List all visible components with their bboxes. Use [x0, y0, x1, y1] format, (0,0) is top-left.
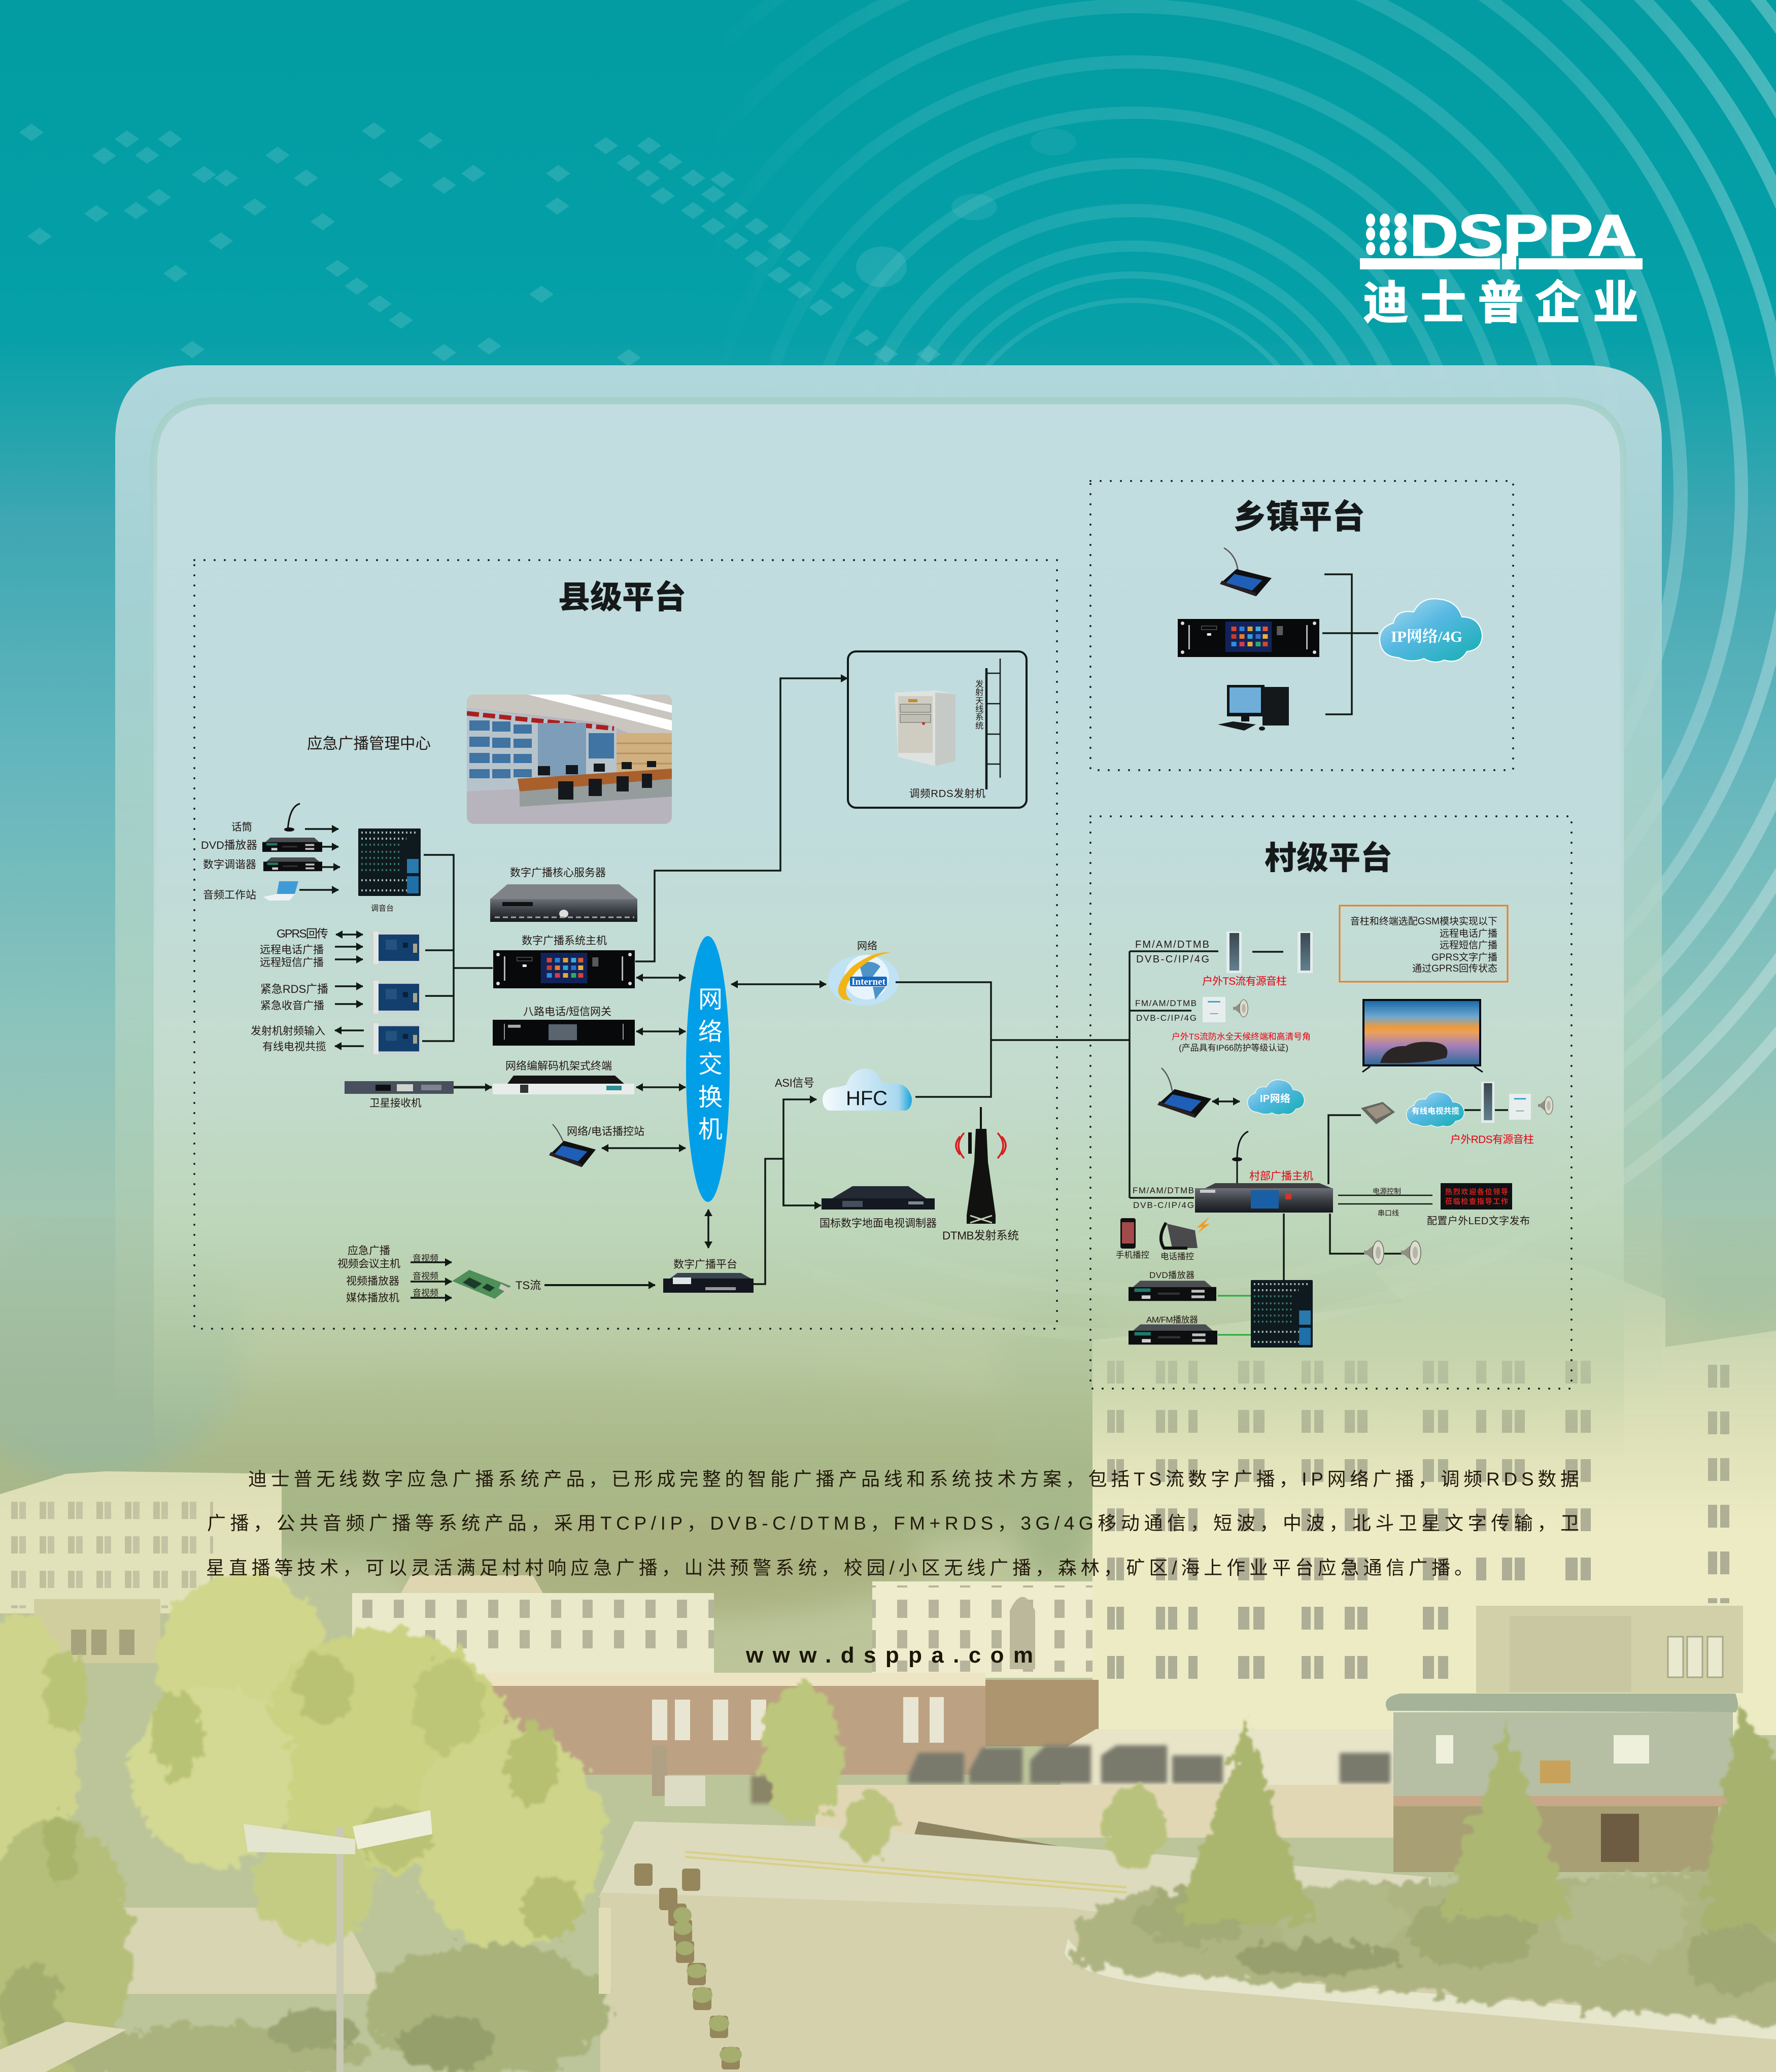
device: satellite receiver — [345, 1081, 454, 1094]
icon: computer — [1218, 685, 1289, 731]
device: modulator — [822, 1186, 935, 1210]
icon: console — [1157, 1068, 1211, 1118]
label: AM FM player: AM/FM播放器 — [1146, 1315, 1198, 1325]
labels: modules: GPRS回传 — [277, 927, 328, 940]
icon: mic — [1232, 1131, 1248, 1184]
speaker column 1 — [1226, 931, 1242, 973]
module card 2 — [370, 980, 422, 1015]
label: platform: 数字广播平台 — [673, 1259, 737, 1270]
labels: modules: 发射机射频输入 — [251, 1025, 325, 1037]
speaker column RDS — [1481, 1082, 1494, 1123]
big right building — [1092, 1240, 1776, 1735]
label: host: 数字广播系统主机 — [522, 935, 607, 947]
label: power control: 电源控制 — [1373, 1187, 1401, 1195]
text block: product description — [206, 1469, 1579, 1578]
logo: DSPPA: DSPPA — [1410, 203, 1636, 268]
labels: modules: 远程电话广播 — [260, 944, 324, 956]
antenna system — [986, 659, 1000, 789]
callout: GSM note: GPRS文字广播 — [1431, 952, 1497, 963]
device: LED display — [1441, 1183, 1512, 1210]
mic — [288, 804, 300, 831]
device: LED display: 热烈欢迎各位领导 — [1445, 1188, 1508, 1196]
label: management center: 应急广播管理中心 — [307, 731, 431, 753]
icon: horn RDS — [1538, 1097, 1553, 1114]
labels: audio sources: 数字调谐器 — [203, 859, 256, 871]
cloud: cable TV: 有线电视共揽 — [1412, 1106, 1459, 1116]
logo: DSPPA: 迪士普企业 — [1363, 266, 1638, 332]
arrows: modules — [335, 935, 364, 1046]
network switch: 换 — [698, 1077, 723, 1113]
labels: signal types 1: DVB-C/IP/4G — [1136, 954, 1209, 965]
main bus — [1130, 951, 1218, 1198]
text block: product description: 广播，公共音频广播等系统产品，采用TCP/IP，DVB-C/DTMB，FM+RDS，3G/4G移动通信，短波，中波，北斗卫星文字传输，卫 — [207, 1513, 1579, 1534]
labels: signal types 2: DVB-C/IP/4G — [1136, 1013, 1197, 1023]
network switch: 网 — [698, 979, 723, 1015]
arrows: sources to mixer — [299, 829, 340, 890]
device: codec terminal — [493, 1076, 634, 1094]
device: core server — [490, 884, 637, 922]
arch building — [872, 1581, 1099, 1678]
labels: audio video: 音视频 — [413, 1254, 438, 1263]
decorative diamonds — [19, 122, 1076, 366]
device: DVD player — [262, 838, 322, 852]
label: outdoor TS column: 户外TS流有源音柱 — [1202, 976, 1287, 987]
device: AM FM player — [1129, 1324, 1217, 1344]
network switch: 交 — [698, 1044, 723, 1080]
label: codec terminal: 网络编解码机架式终端 — [505, 1060, 612, 1072]
icon: internet globe — [828, 952, 899, 1006]
label: LED publishing: 配置户外LED文字发布 — [1427, 1215, 1530, 1227]
device: platform — [663, 1273, 754, 1293]
labels: media sources: 媒体播放机 — [346, 1292, 399, 1304]
device: TV — [1362, 999, 1483, 1072]
connector: host to mixer — [1283, 1214, 1285, 1280]
panel: inner rounded frame — [154, 401, 1624, 1471]
label: antenna vertical: 天 — [975, 697, 983, 706]
labels: signal types 1: FM/AM/DTMB — [1135, 939, 1209, 950]
central white buildings — [352, 1593, 714, 1674]
logo: DSPPA — [1360, 203, 1643, 332]
cone trees — [761, 1684, 1776, 1928]
brick buildings — [396, 1676, 985, 1775]
device: LED display: 莅临检查指导工作 — [1445, 1197, 1508, 1205]
cloud: IP network: IP网络 — [1260, 1092, 1290, 1104]
callout: GSM note: 音柱和终端选配GSM模块实现以下 — [1350, 916, 1497, 927]
connector: host to horns — [1330, 1214, 1401, 1254]
text block: product description: 星直播等技术，可以灵活满足村村响应急广播，山洪预警系统，校园/小区无线广播，森林，矿区/海上作业平台应急通信广播。 — [206, 1558, 1473, 1578]
icon: horn left — [1364, 1241, 1384, 1264]
background photo: town street scene — [0, 1207, 1776, 2072]
arrow: receiver to terminal — [454, 1086, 492, 1089]
icon: console — [1220, 548, 1272, 596]
icon: DTMB tower — [956, 1107, 1006, 1224]
icon: control station — [549, 1124, 596, 1167]
icon: horn right — [1401, 1241, 1421, 1264]
arrows: devices to switch — [602, 978, 686, 1148]
device: terminal RDS — [1509, 1094, 1531, 1120]
callout: GSM note: 远程短信广播 — [1440, 940, 1497, 951]
module card 3 — [370, 1022, 422, 1055]
left tree masses — [0, 1573, 609, 2072]
device: rack host — [1178, 619, 1319, 657]
connector: network to village — [896, 982, 1130, 1097]
icon: bolt — [1197, 1217, 1210, 1233]
device: RDS card — [1361, 1102, 1395, 1124]
arrow: ASI up to HFC — [783, 1099, 816, 1205]
callout: GSM note: 远程电话广播 — [1440, 928, 1497, 939]
device: gateway — [493, 1020, 635, 1046]
labels: signal types 3: FM/AM/DTMB — [1133, 1186, 1194, 1195]
cloud: IP network 4G: IP网络/4G — [1391, 628, 1462, 645]
plant bed — [1065, 1938, 1776, 2040]
speaker column 2 — [1297, 931, 1313, 973]
cloud: HFC: HFC — [846, 1087, 887, 1110]
connector: host to RDS card — [1328, 1115, 1361, 1184]
panel: township platform — [1090, 481, 1513, 770]
network switch: 络 — [698, 1012, 723, 1047]
heading: township platform: 乡镇平台 — [1233, 490, 1365, 538]
device: host — [493, 950, 635, 988]
label: antenna vertical: 射 — [975, 687, 983, 697]
device: mixer — [358, 828, 421, 896]
label: satellite receiver: 卫星接收机 — [369, 1097, 422, 1109]
labels: audio video — [413, 1254, 438, 1298]
labels: modules: 远程短信广播 — [260, 957, 324, 969]
left hotel — [0, 1471, 282, 1613]
network switch — [686, 936, 730, 1202]
labels: signal types 3 — [1133, 1186, 1194, 1210]
connector: host to RDS transmitter — [635, 678, 847, 961]
arrow: switch to platform — [707, 1210, 709, 1248]
label: outdoor TS terminal: 户外TS流防水全天候终端和高清号角 — [1172, 1032, 1311, 1042]
links: cloud column box — [1464, 1109, 1508, 1111]
label: antenna vertical: 系 — [975, 712, 983, 722]
label: ASI signal: ASI信号 — [775, 1077, 814, 1089]
label: network: 网络 — [857, 940, 877, 952]
cloud: IP network — [1248, 1080, 1304, 1115]
labels: modules — [251, 927, 328, 1053]
label: telephone control: 电话播控 — [1160, 1252, 1194, 1261]
arrow: TS to platform — [544, 1284, 655, 1286]
device: DVD player — [1129, 1281, 1216, 1301]
labels: audio sources: 话筒 — [231, 821, 252, 833]
cloud: HFC — [823, 1068, 912, 1111]
icon: laptop — [263, 881, 298, 901]
labels: media sources: 应急广播 — [348, 1245, 390, 1257]
photo: control room — [467, 695, 672, 824]
labels: signal types 2: FM/AM/DTMB — [1135, 998, 1197, 1008]
mic base — [284, 827, 294, 832]
connector: serial and power — [1338, 1195, 1432, 1204]
label: modulator: 国标数字地面电视调制器 — [819, 1218, 937, 1229]
labels: audio video: 音视频 — [413, 1288, 438, 1298]
heading: county platform: 县级平台 — [558, 572, 686, 618]
label: TS stream: TS流 — [516, 1279, 541, 1292]
labels: audio sources — [201, 821, 394, 913]
icon: internet globe: Internet — [851, 977, 886, 987]
label: antenna vertical: 线 — [975, 704, 983, 714]
arrow: switch to internet — [731, 983, 826, 985]
device: village host — [1195, 1183, 1333, 1213]
label: antenna vertical — [975, 679, 983, 731]
labels: modules: 紧急收音广播 — [260, 1000, 324, 1012]
label: control station: 网络/电话播控站 — [567, 1126, 644, 1137]
icon: telephone — [1161, 1223, 1198, 1248]
box: RDS transmitter — [848, 651, 1027, 808]
label: outdoor RDS: 户外RDS有源音柱 — [1450, 1134, 1534, 1146]
device: terminal — [1203, 997, 1225, 1022]
road — [599, 1821, 1431, 1923]
link between columns — [1252, 951, 1283, 953]
labels: modules: 紧急RDS广播 — [260, 983, 328, 995]
labels: media sources: 视频会议主机 — [337, 1258, 400, 1270]
labels: signal types 3: DVB-C/IP/4G — [1133, 1200, 1194, 1210]
panel: village platform — [1090, 816, 1572, 1389]
icon: horn — [1233, 999, 1248, 1017]
connector: platform to HFC and modulator — [754, 1159, 783, 1284]
label: phone control: 手机播控 — [1116, 1250, 1149, 1260]
label: core server: 数字广播核心服务器 — [510, 867, 606, 879]
green building — [1393, 1712, 1733, 1799]
labels: media sources — [337, 1245, 400, 1304]
icon: mobile phone — [1120, 1218, 1136, 1249]
parking and wall — [1061, 1729, 1393, 1791]
device: transmitter — [895, 690, 955, 766]
callout: GSM note — [1340, 906, 1508, 982]
labels: audio sources: DVD播放器 — [201, 839, 257, 851]
label: DTMB: DTMB发射系统 — [942, 1229, 1019, 1242]
labels: signal types 1 — [1135, 939, 1209, 965]
device: digital tuner — [263, 857, 322, 871]
labels: audio sources: 音频工作站 — [203, 889, 256, 901]
label: gateway: 八路电话/短信网关 — [523, 1006, 611, 1018]
label: RDS transmitter: 调频RDS发射机 — [909, 788, 985, 800]
arrow: ASI to modulator — [783, 1159, 821, 1205]
labels: media sources: 视频播放器 — [346, 1275, 399, 1287]
label: serial line: 串口线 — [1378, 1209, 1399, 1217]
labels: audio sources: 调音台 — [371, 904, 394, 913]
arrow: console to IP cloud — [1212, 1100, 1240, 1102]
decorative concentric rings — [290, 0, 1776, 1335]
barrels — [634, 1863, 742, 2069]
module card 1 — [370, 930, 422, 965]
panel: outer rounded frame — [115, 365, 1662, 1421]
heading: village platform: 村级平台 — [1265, 833, 1392, 879]
connector bracket — [1322, 574, 1378, 714]
device: TS card — [452, 1270, 511, 1299]
text block: product description: 迪士普无线数字应急广播系统产品，已形成完整的智能广播产品线和系统技术方案，包括TS流数字广播，IP网络广播，调频RDS数据 — [248, 1469, 1579, 1490]
network switch: 机 — [698, 1109, 723, 1145]
label: DVD player: DVD播放器 — [1149, 1270, 1194, 1280]
label: IP66: (产品具有IP66防护等级认证) — [1179, 1043, 1288, 1053]
green links — [1218, 1296, 1251, 1335]
label: village host: 村部广播主机 — [1249, 1170, 1313, 1182]
labels: modules: 有线电视共揽 — [262, 1041, 326, 1053]
connector: cards to host — [422, 855, 493, 1041]
panel: county platform — [194, 560, 1130, 1329]
label: antenna vertical: 发 — [975, 679, 983, 689]
cloud: IP network 4G — [1380, 599, 1482, 662]
cloud: cable TV — [1407, 1092, 1464, 1127]
labels: signal types 2 — [1135, 998, 1197, 1023]
callout: GSM note: 通过GPRS回传状态 — [1412, 963, 1497, 974]
label: antenna vertical: 统 — [975, 721, 983, 731]
arrows: media to card — [411, 1262, 452, 1298]
device: village mixer — [1251, 1280, 1313, 1348]
website url: www.dsppa.com — [745, 1643, 1033, 1668]
labels: audio video: 音视频 — [413, 1271, 438, 1281]
left pavement — [113, 1908, 386, 1994]
